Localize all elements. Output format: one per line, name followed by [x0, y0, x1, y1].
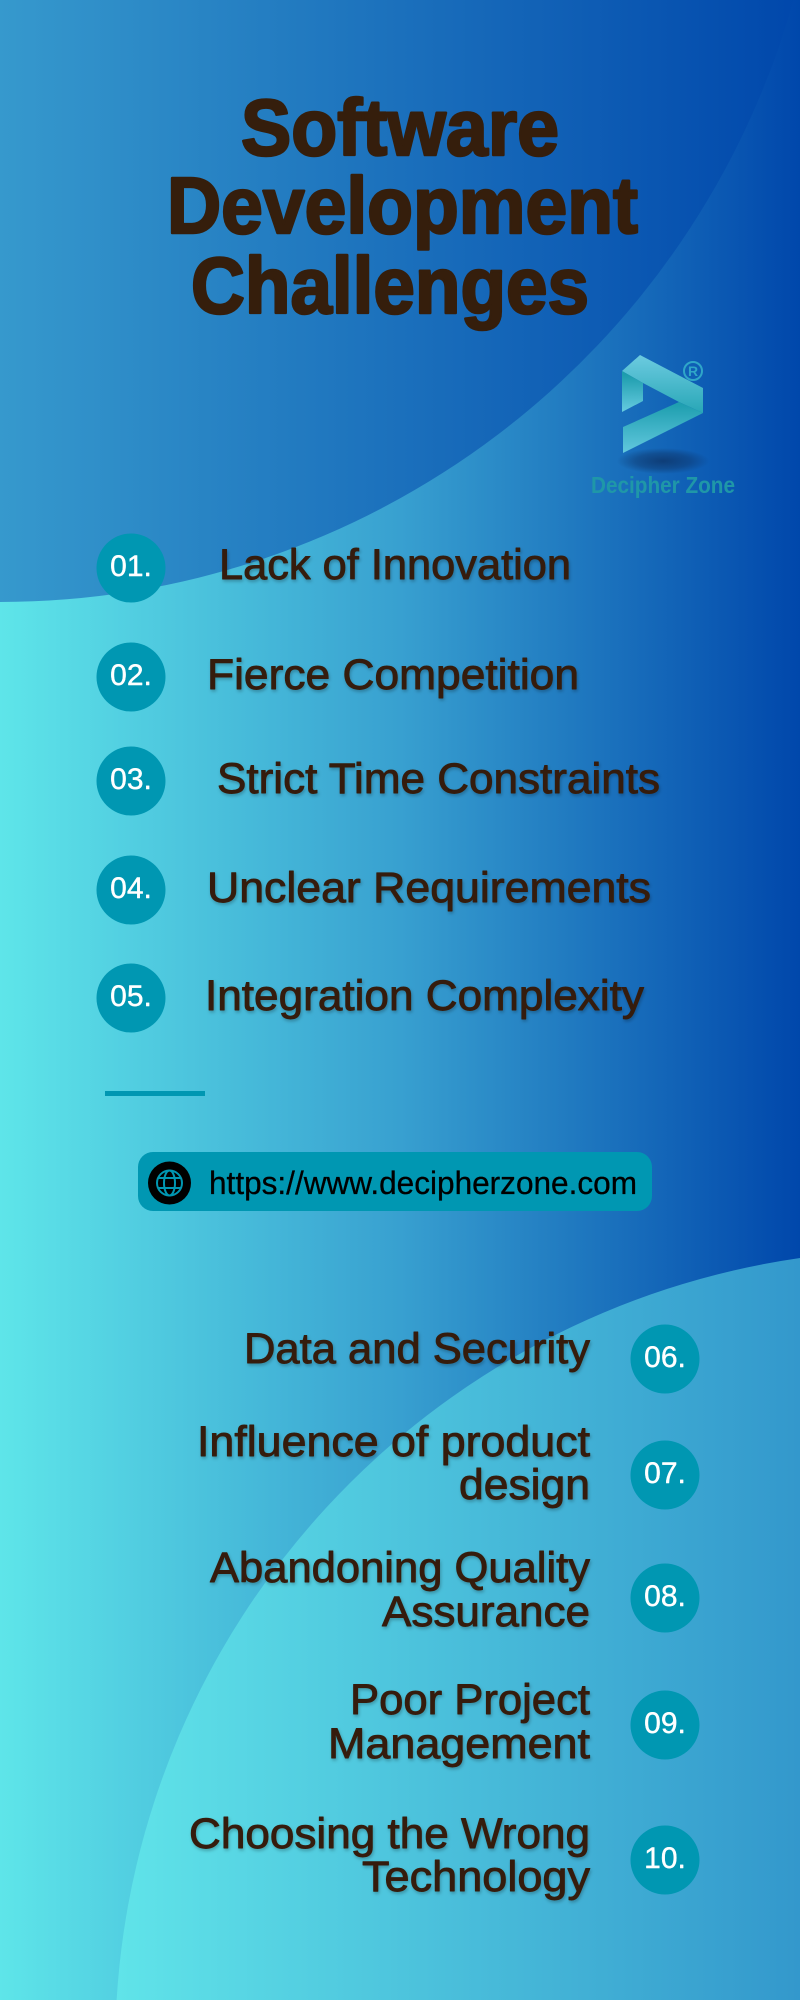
item 06 — [244, 1324, 700, 1394]
item 08: 08. — [644, 1580, 686, 1613]
item 10: 10. — [644, 1842, 686, 1875]
item 10: Choosing the Wrong — [189, 1810, 590, 1858]
item 07 — [197, 1418, 700, 1510]
bottom curved panel — [117, 1258, 800, 2000]
item 01: Lack of Innovation — [219, 541, 571, 589]
divider — [105, 1091, 205, 1096]
item 01 — [96, 534, 571, 602]
item 04 — [96, 856, 651, 924]
item 05 — [96, 964, 645, 1032]
registered mark — [684, 362, 702, 380]
item 10: Technology — [362, 1853, 591, 1901]
item 08: Assurance — [382, 1588, 590, 1636]
title: Challenges — [191, 241, 589, 330]
item 07: design — [459, 1461, 590, 1509]
item 07: 07. — [644, 1457, 686, 1490]
item 08: Abandoning Quality — [210, 1544, 591, 1592]
icon: globe — [148, 1162, 191, 1204]
item 09 — [328, 1676, 700, 1768]
item 09: Management — [328, 1720, 590, 1768]
item 07: Influence of product — [197, 1418, 590, 1466]
title: Software — [241, 83, 559, 172]
item 04: 04. — [110, 872, 152, 905]
title — [167, 83, 638, 330]
logo: Decipher Zone — [591, 355, 735, 498]
website url: https://www.decipherzone.com — [209, 1165, 637, 1201]
item 06: 06. — [644, 1341, 686, 1374]
item 06: Data and Security — [244, 1325, 591, 1373]
item 03 — [96, 746, 660, 816]
logo shadow — [617, 448, 709, 474]
item 03: Strict Time Constraints — [217, 755, 660, 803]
item 09: 09. — [644, 1707, 686, 1740]
item 10 — [189, 1810, 700, 1901]
item 09: Poor Project — [350, 1676, 590, 1724]
item 02 — [96, 642, 579, 712]
logo mark — [622, 355, 703, 453]
item 05: 05. — [110, 980, 152, 1013]
item 08 — [210, 1544, 700, 1636]
title: Development — [167, 161, 638, 250]
item 04: Unclear Requirements — [207, 864, 651, 912]
item 02: Fierce Competition — [207, 651, 579, 699]
item 01: 01. — [110, 550, 152, 583]
logo wordmark: Decipher Zone — [591, 472, 735, 498]
registered mark: R — [688, 363, 698, 379]
item 03: 03. — [110, 763, 152, 796]
item 02: 02. — [110, 659, 152, 692]
website pill — [138, 1152, 652, 1211]
item 05: Integration Complexity — [205, 972, 645, 1020]
top curved panel — [0, 0, 794, 602]
